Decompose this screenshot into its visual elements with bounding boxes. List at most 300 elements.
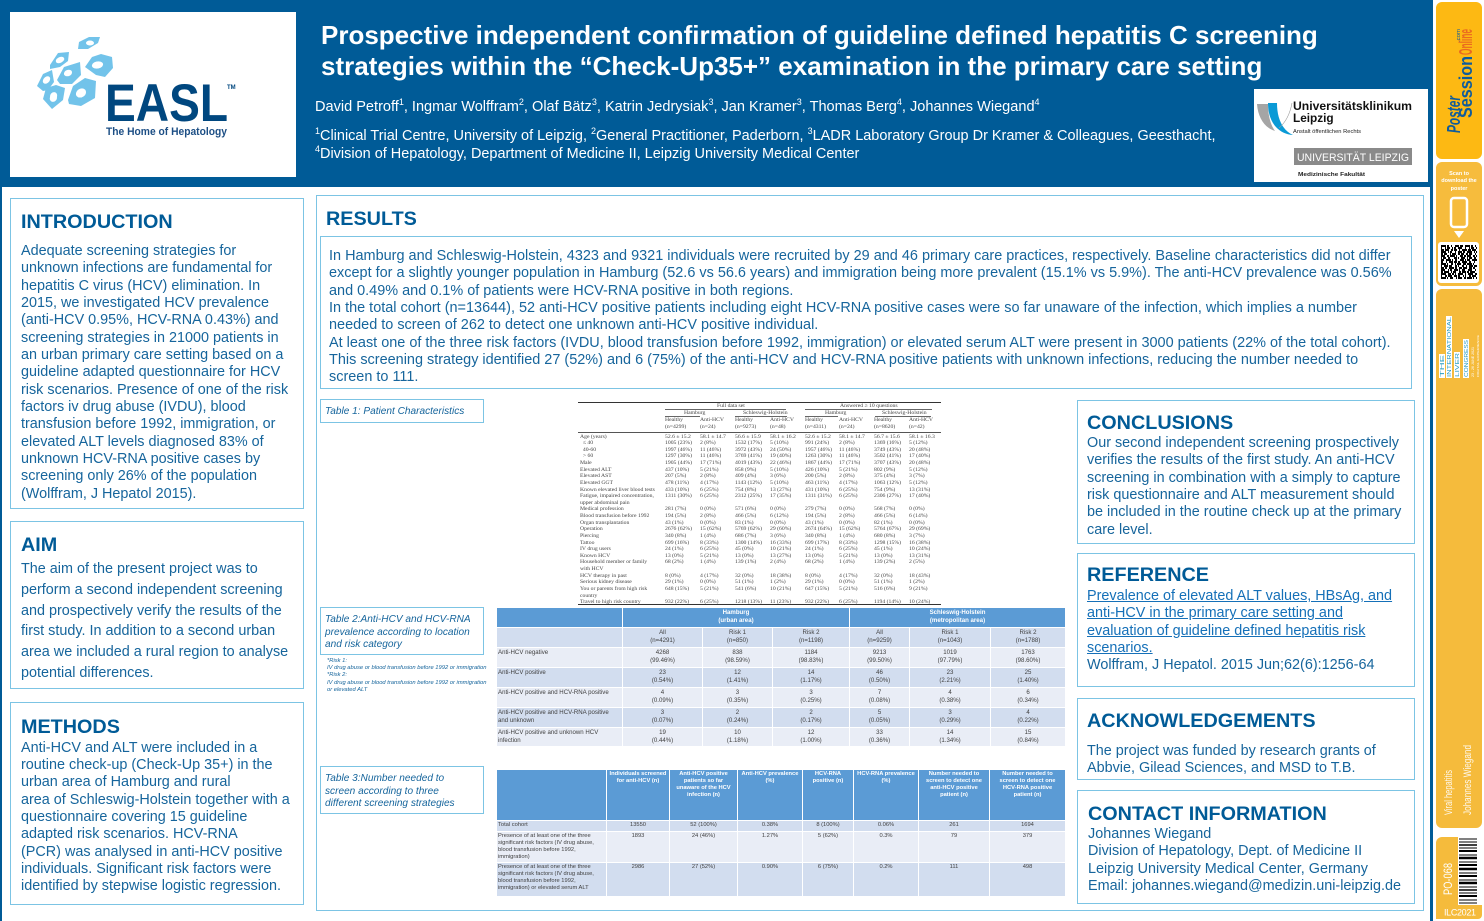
text: 4 (17%)	[700, 573, 718, 579]
table 2: prevalence: Risk 2	[1020, 629, 1036, 636]
title: strategies within the “Check-Up35+” examination in the primary care setting	[321, 51, 1262, 81]
text: 541 (6%)	[735, 586, 756, 592]
table 2: prevalence: (0.50%)	[869, 677, 890, 684]
text: 1 (2%)	[770, 579, 786, 585]
table 1: patient characteristics: Healthy	[735, 417, 753, 423]
text: 571 (6%)	[735, 506, 756, 512]
text: 24 (1%)	[665, 546, 683, 552]
table 3: number needed to screen: patient (n)	[940, 792, 968, 798]
text: Elevated AST	[580, 473, 612, 479]
text: 11 (46%)	[700, 453, 721, 459]
table 2: prevalence: 5	[878, 709, 881, 716]
text: 1143 (12%)	[735, 480, 762, 486]
text: reference: anti-HCV in the primary care setting and	[1087, 605, 1343, 621]
results summary text box: screen to 111.	[329, 369, 418, 385]
text: 5 (12%)	[909, 467, 927, 473]
logo: The International Liver Congress: LIVER	[1455, 352, 1461, 377]
table 3 caption: screen according to three	[325, 786, 439, 797]
table 3: number needed to screen: HCV-RNA positive	[1003, 785, 1052, 791]
text: 29 (69%)	[909, 526, 930, 532]
heading: conclusions: CONCLUSIONS	[1087, 412, 1233, 434]
table 2 footnote	[327, 658, 487, 693]
table 3: number needed to screen: significant risk factors (IV drug abuse,	[498, 871, 594, 877]
text: 1063 (12%)	[874, 480, 901, 486]
heading: introduction: INTRODUCTION	[21, 211, 173, 233]
table 3: number needed to screen: screen to detect one	[1000, 778, 1055, 784]
table 2: prevalence: (0.17%)	[800, 717, 822, 724]
text: 2 (5%)	[909, 559, 925, 565]
text: 463 (11%)	[805, 480, 829, 486]
logo: EASL: TM	[227, 85, 236, 91]
text: 5 (21%)	[700, 553, 718, 559]
text: 17 (35%)	[770, 493, 791, 499]
text: 6 (25%)	[839, 599, 857, 605]
text: introduction: elevated ALT levels diagnosed 83% of	[21, 434, 264, 450]
text: 3 (7%)	[909, 473, 925, 479]
text: 8 (0%)	[665, 573, 681, 579]
table 2: prevalence: (n=1043)	[938, 637, 962, 644]
text: 17 (40%)	[909, 493, 930, 499]
text: 11 (46%)	[700, 447, 721, 453]
text: 754 (8%)	[735, 486, 756, 492]
text: 5769 (62%)	[735, 526, 762, 532]
table 2: prevalence: 46	[876, 669, 883, 676]
text: 1297 (30%)	[665, 453, 692, 459]
table 2: prevalence: Schleswig-Holstein	[930, 609, 985, 616]
text: 6 (25%)	[700, 599, 718, 605]
text: 4 (17%)	[700, 480, 718, 486]
panel: scan QR code	[1436, 162, 1482, 286]
text: 0 (0%)	[909, 520, 925, 526]
table 3: number needed to screen: for anti-HCV (n)	[617, 778, 659, 784]
table 1: patient characteristics: (n=48)	[770, 424, 786, 430]
text: reference	[1087, 588, 1392, 673]
table 3: number needed to screen: patient (n)	[1014, 792, 1041, 798]
text: 58.1 ± 16.2	[770, 434, 796, 440]
table 3: number needed to screen: 6 (75%)	[818, 864, 838, 870]
table 2: prevalence: (0.35%)	[727, 697, 748, 704]
text: ≤ 40	[583, 440, 593, 446]
text: 1 (4%)	[700, 533, 716, 539]
table 2: prevalence: (0.22%)	[1017, 717, 1039, 724]
table 2: prevalence: (0.84%)	[1017, 737, 1039, 744]
panel: methods	[10, 702, 304, 905]
text: 466 (5%)	[735, 513, 756, 519]
text: introduction: guideline adapted questionnaire for HCV	[21, 364, 280, 380]
text: Organ transplantation	[580, 520, 629, 526]
logo: Universitätsklinikum Leipzig: Universitätsklinikum	[1293, 99, 1412, 113]
logo: Universitätsklinikum Leipzig: UNIVERSITÄT LEIPZIG	[1297, 152, 1409, 164]
text: 2 (4%)	[770, 559, 786, 565]
text: 478 (11%)	[665, 480, 689, 486]
results summary text box: needed to screen of 262 to detect one unknown anti-HCV positive individual.	[329, 317, 818, 333]
text: 8 (33%)	[839, 540, 857, 546]
logo: EASL: EASL	[105, 74, 228, 133]
panel: scan QR code: Scan to	[1449, 171, 1470, 177]
text: Male	[580, 460, 592, 466]
text: Medical profession	[580, 506, 624, 512]
text: 5764 (67%)	[874, 526, 901, 532]
text: HCV therapy in past	[580, 573, 627, 579]
text: introduction: an urban primary care setting based on a	[21, 347, 283, 363]
poster number: PO-068	[1441, 863, 1455, 895]
text: 0 (0%)	[839, 520, 855, 526]
text: 0 (0%)	[839, 579, 855, 585]
logo: The International Liver Congress: DIGITAL EXPERIENCE	[1476, 335, 1480, 377]
table 2: prevalence: 1184	[804, 649, 818, 656]
text: 6 (25%)	[839, 493, 857, 499]
text: 6 (25%)	[700, 546, 718, 552]
text: introduction: factors iv drug abuse (IVDU), blood	[21, 399, 246, 415]
logo: The International Liver Congress: CONGRESS	[1464, 339, 1470, 377]
text: 17 (40%)	[909, 453, 930, 459]
table 3: number needed to screen: Anti-HCV prevalence	[742, 771, 798, 777]
text: 17 (71%)	[839, 460, 860, 466]
table 2 footnote: *Risk 1:	[327, 658, 347, 664]
table 1: patient characteristics: Anti-HCV	[770, 417, 794, 423]
heading: contact information: CONTACT INFORMATION	[1088, 803, 1327, 825]
logo: EASL: The Home of Hepatology	[106, 126, 228, 138]
affiliations	[315, 126, 1215, 162]
text: 5 (21%)	[839, 586, 857, 592]
text: 13 (0%)	[805, 553, 823, 559]
table 2: prevalence: (2.21%)	[939, 677, 961, 684]
table 3: number needed to screen: (%)	[882, 778, 890, 784]
panel: PosterSessionOnline brand: Poster	[1444, 95, 1464, 133]
table 2: prevalence: 6	[1026, 689, 1030, 696]
text: 6 (25%)	[839, 546, 857, 552]
text: introduction: (Wolffram, J Hepatol 2015).	[21, 486, 196, 502]
text: 1 (4%)	[839, 559, 855, 565]
panel: PosterSessionOnline brand: .com	[1456, 29, 1462, 42]
table 2: prevalence: 3	[661, 709, 664, 716]
table 1: patient characteristics: (n=42)	[909, 424, 925, 430]
text: 3 (7%)	[909, 533, 925, 539]
table 2: prevalence: (n=1198)	[799, 637, 823, 644]
table 2: prevalence: Anti-HCV positive and HCV-RNA positive	[498, 709, 609, 716]
text: 4 (17%)	[839, 573, 857, 579]
text: 1194 (14%)	[874, 599, 901, 605]
text: 375 (4%)	[874, 473, 895, 479]
table 2: prevalence: (0.25%)	[800, 697, 822, 704]
text: 1957 (46%)	[805, 447, 832, 453]
heading: acknowledgements: ACKNOWLEDGEMENTS	[1087, 710, 1316, 732]
table 2: prevalence: 1763	[1021, 649, 1035, 656]
text: 3502 (41%)	[874, 453, 901, 459]
text: 1005 (23%)	[665, 440, 692, 446]
text: contact information	[1088, 826, 1401, 894]
table 3: number needed to screen: patients so far	[684, 778, 723, 784]
text: 340 (8%)	[665, 533, 686, 539]
text: 5 (21%)	[839, 467, 857, 473]
text: Elevated ALT	[580, 467, 612, 473]
text: introduction: (anti-HCV 0.95%, HCV-RNA 0.43%) and	[21, 312, 279, 328]
table 2: prevalence: (1.18%)	[727, 737, 748, 744]
table 2: prevalence: Anti-HCV positive and HCV-RNA positive	[498, 689, 609, 696]
text: 29 (60%)	[770, 526, 791, 532]
text: Operation	[580, 526, 603, 532]
text: 0 (0%)	[839, 506, 855, 512]
text: introduction: risk scenarios. Presence of one of the risk	[21, 382, 288, 398]
table 3: number needed to screen: 0.2%	[879, 864, 893, 870]
text: 647 (15%)	[805, 586, 829, 592]
text: 437 (10%)	[665, 467, 689, 473]
text: 16 (38%)	[909, 540, 930, 546]
text: 5 (10%)	[770, 440, 788, 446]
table 2: prevalence: (1.17%)	[800, 677, 822, 684]
text: 139 (2%)	[874, 559, 895, 565]
table 1: patient characteristics: (n=9273)	[735, 424, 756, 430]
text: 281 (7%)	[665, 506, 686, 512]
text: 19 (40%)	[770, 453, 791, 459]
table 2: prevalence: 2	[809, 709, 813, 716]
text: 6 (25%)	[700, 486, 718, 492]
table 2: prevalence: 12	[808, 729, 814, 736]
heading: aim: AIM	[21, 534, 57, 556]
table 1: patient characteristics: Hamburg	[684, 410, 705, 416]
table 2: prevalence: All	[876, 629, 883, 636]
text: 51 (1%)	[735, 579, 753, 585]
conference tag	[1436, 905, 1482, 919]
table 3: number needed to screen: 5 (62%)	[818, 833, 838, 839]
affiliations: 1Clinical Trial Centre, University of Leipzig, 2General Practitioner, Paderborn, 3LADR Laboratory Group Dr Kramer & Colleagues, Geesthacht,	[315, 126, 1215, 144]
text: 32 (0%)	[735, 573, 753, 579]
table 2: prevalence: 2	[736, 709, 739, 716]
table 2: prevalence: (0.29%)	[939, 717, 961, 724]
text: Blood transfusion before 1992	[580, 513, 649, 519]
heading: results: RESULTS	[326, 208, 417, 230]
text: 32 (0%)	[874, 573, 892, 579]
table 1 caption: Table 1: Patient Characteristics	[325, 406, 464, 417]
table 3: number needed to screen: Anti-HCV positive	[679, 771, 728, 777]
logo: Universitätsklinikum Leipzig: Leipzig	[1293, 111, 1334, 125]
table 3: number needed to screen: 498	[1023, 864, 1032, 870]
table 2: prevalence: All	[659, 629, 666, 636]
table 3: number needed to screen: 52 (100%)	[690, 822, 717, 828]
poster number	[1436, 837, 1458, 905]
text: Household member or family	[580, 559, 647, 565]
text: 10 (21%)	[770, 546, 791, 552]
text: 29 (1%)	[665, 579, 683, 585]
table 1: patient characteristics	[578, 402, 941, 605]
text: 0 (0%)	[700, 579, 716, 585]
table 1: patient characteristics: Healthy	[665, 417, 683, 423]
table 2: prevalence: (n=9259)	[867, 637, 892, 644]
text: 1 (4%)	[839, 533, 855, 539]
text: 18 (38%)	[770, 573, 791, 579]
results summary text box: In Hamburg and Schleswig-Holstein, 4323 and 9321 individuals were recruited by 29 and 46 primary care practices, respectively. Baseline characteristics did not differ	[329, 248, 1391, 264]
text: reference: scenarios.	[1087, 640, 1153, 656]
table 3 caption	[320, 766, 484, 814]
text: 58.1 ± 16.3	[909, 434, 935, 440]
table 3: number needed to screen: Total cohort	[498, 822, 528, 828]
table 2: prevalence: 19	[659, 729, 666, 736]
table 3: number needed to screen: 111	[950, 864, 958, 870]
table 3: number needed to screen: 27 (52%)	[692, 864, 715, 870]
text: 10 (21%)	[770, 586, 791, 592]
text: methods: urban area of Hamburg and rural	[21, 774, 231, 790]
table 3: number needed to screen: unaware of the HCV	[676, 785, 731, 791]
text: 991 (24%)	[805, 440, 829, 446]
text: methods: routine check-up (Check-Up 35+) in the	[21, 757, 273, 773]
text: 45 (1%)	[874, 546, 892, 552]
text: 1 (2%)	[909, 579, 925, 585]
text: conclusions: Our second independent screening prospectively	[1087, 435, 1399, 451]
results summary text box: except for a slightly younger population in Hamburg (52.6 vs 56.6 years) and immigration being more prevalent (15.1% vs 5.9%). The anti-HCV prevalence was 0.56%	[329, 265, 1392, 281]
table 2: prevalence: (urban area)	[718, 617, 754, 624]
text: upper abdominal pain	[580, 500, 630, 506]
table 3: number needed to screen: 261	[949, 822, 959, 828]
text: introduction: transfusion before 1992, immigration, or	[21, 416, 275, 432]
logo: The International Liver Congress: INTERNATIONAL	[1447, 317, 1453, 377]
text: 516 (6%)	[874, 586, 895, 592]
text: 3749 (43%)	[874, 447, 901, 453]
table 1: patient characteristics: (n=24)	[700, 424, 716, 430]
text: 56.6 ± 15.9	[735, 434, 761, 440]
authors: David Petroff1, Ingmar Wolffram2, Olaf Bätz3, Katrin Jedrysiak3, Jan Kramer3, Thomas Berg4, Johannes Wiegand4	[315, 97, 1040, 115]
text: 40-60	[583, 447, 596, 453]
text: 13 (27%)	[770, 553, 791, 559]
sidebar	[1436, 2, 1482, 919]
text: 194 (5%)	[665, 513, 686, 519]
text: 2 (8%)	[700, 513, 716, 519]
table 2: prevalence: (1.00%)	[800, 737, 822, 744]
text: aim: first study. In addition to a second urban	[21, 623, 275, 639]
table 1: patient characteristics: Healthy	[805, 417, 823, 423]
text: Known HCV	[580, 553, 610, 559]
table 2: prevalence: Risk 2	[803, 629, 819, 636]
text: 648 (15%)	[665, 586, 689, 592]
text: 5 (10%)	[770, 467, 788, 473]
text: aim: The aim of the present project was to	[21, 561, 258, 577]
text: 8 (0%)	[805, 573, 821, 579]
table 2 caption	[320, 607, 484, 655]
table 2: prevalence: (97.79%)	[938, 657, 962, 664]
header band	[0, 0, 1433, 187]
table 1: patient characteristics: Answered ≥ 10 questions	[840, 403, 898, 409]
table 3: number needed to screen: 13550	[630, 822, 646, 828]
table 2: prevalence: (0.54%)	[652, 677, 673, 684]
table 2: prevalence: (0.44%)	[652, 737, 673, 744]
text: Fatigue, impaired concentration,	[580, 493, 654, 499]
text: 82 (1%)	[874, 520, 892, 526]
title	[321, 20, 1318, 81]
table 3: number needed to screen: 24 (46%)	[692, 833, 715, 839]
text: 20 (48%)	[909, 447, 930, 453]
table 3: number needed to screen: screen to detect one	[926, 778, 982, 784]
text: 45 (0%)	[735, 546, 753, 552]
text: 3972 (43%)	[735, 447, 762, 453]
table 3: number needed to screen: immigration) or elevated serum ALT	[498, 885, 589, 891]
text: Elevated GGT	[580, 480, 613, 486]
table 3: number needed to screen: Number needed to	[929, 771, 979, 777]
table 2: prevalence: 15	[1025, 729, 1031, 736]
table 2: prevalence: 33	[876, 729, 883, 736]
text: You or parents from high risk	[580, 586, 647, 592]
text: 83 (1%)	[735, 520, 753, 526]
table 3: number needed to screen: Individuals screened	[610, 771, 666, 777]
panel: reference	[1077, 553, 1415, 687]
table 2: prevalence: 3	[809, 689, 813, 696]
table 2: prevalence: 25	[1025, 669, 1031, 676]
table 2: prevalence: (99.50%)	[867, 657, 892, 664]
text: presenter: Johannes Wiegand	[1462, 745, 1474, 815]
text: 5 (21%)	[700, 586, 718, 592]
table 3: number needed to screen: 79	[951, 833, 957, 839]
text: 431 (10%)	[805, 486, 829, 492]
text: conclusions: verifies the results of the first study. An anti-HCV	[1087, 452, 1395, 468]
text: 58.1 ± 14.7	[839, 434, 865, 440]
logo: The International Liver Congress	[1439, 316, 1480, 378]
table 1: patient characteristics: Full data set	[717, 403, 745, 409]
table 2: prevalence: 23	[947, 669, 953, 676]
text: 6 (25%)	[700, 493, 718, 499]
text: 8 (33%)	[700, 540, 718, 546]
logo: The International Liver Congress: THE	[1440, 354, 1446, 377]
text: 24 (50%)	[770, 447, 791, 453]
text: 686 (7%)	[735, 533, 756, 539]
table 2: prevalence: Anti-HCV positive and unknown HCV	[498, 729, 598, 736]
text: 2312 (25%)	[735, 493, 762, 499]
table 2: prevalence: (98.59%)	[725, 657, 750, 664]
text: 51 (1%)	[874, 579, 892, 585]
text: 3707 (43%)	[874, 460, 901, 466]
table 2: prevalence: (0.09%)	[652, 697, 673, 704]
text: 568 (7%)	[874, 506, 895, 512]
table 1: patient characteristics: Anti-HCV	[909, 417, 933, 423]
table 3: number needed to screen: 1.27%	[762, 833, 778, 839]
panel: scan QR code: poster	[1451, 186, 1468, 192]
text: 3769 (41%)	[735, 453, 762, 459]
table 3: number needed to screen: 8 (100%)	[816, 822, 840, 828]
text: introduction: 2015, we investigated HCV prevalence	[21, 295, 269, 311]
table 3: number needed to screen: 1694	[1021, 822, 1034, 828]
text: methods	[21, 740, 290, 894]
text: 9 (21%)	[909, 586, 927, 592]
table 3: number needed to screen: anti-HCV positive	[930, 785, 978, 791]
page frame right	[1430, 187, 1433, 921]
table 2: prevalence: 12	[734, 669, 741, 676]
results summary text box: This screening strategy identified 27 (52%) and 6 (75%) of the anti-HCV and HCV-RNA positive patients with unknown infections, reducing the number needed to	[329, 352, 1358, 368]
text: methods: identified by stepwise logistic regression.	[21, 878, 281, 894]
table 1: patient characteristics: (n=4311)	[805, 424, 826, 430]
text: contact information: Johannes Wiegand	[1088, 826, 1211, 842]
text: 13 (31%)	[909, 486, 930, 492]
table 2: prevalence: and unknown	[498, 717, 534, 724]
text: 409 (4%)	[735, 473, 756, 479]
table 2: prevalence: (98.83%)	[799, 657, 823, 664]
text: 802 (9%)	[874, 467, 895, 473]
table 2: prevalence: (metropolitan area)	[930, 617, 985, 624]
text: 6 (14%)	[909, 513, 927, 519]
text: aim	[21, 561, 288, 681]
table 1: patient characteristics: Anti-HCV	[839, 417, 863, 423]
text: methods: (PCR) was analysed in anti-HCV positive	[21, 844, 283, 860]
text: 5 (12%)	[909, 440, 927, 446]
text: 2 (8%)	[839, 440, 855, 446]
text: 13 (0%)	[735, 553, 753, 559]
text: 139 (1%)	[735, 559, 756, 565]
text: 52.6 ± 15.2	[805, 434, 831, 440]
text: 13 (0%)	[665, 553, 683, 559]
text: 13 (27%)	[770, 486, 791, 492]
text: introduction: screening strategies in 21000 patients in	[21, 330, 279, 346]
table 1: patient characteristics: (n=4299)	[665, 424, 686, 430]
table 2: prevalence: (n=4291)	[650, 637, 675, 644]
table 3: number needed to screen: immigration)	[498, 854, 530, 860]
table 2: prevalence: 3	[948, 709, 952, 716]
panel: results	[316, 195, 1424, 911]
